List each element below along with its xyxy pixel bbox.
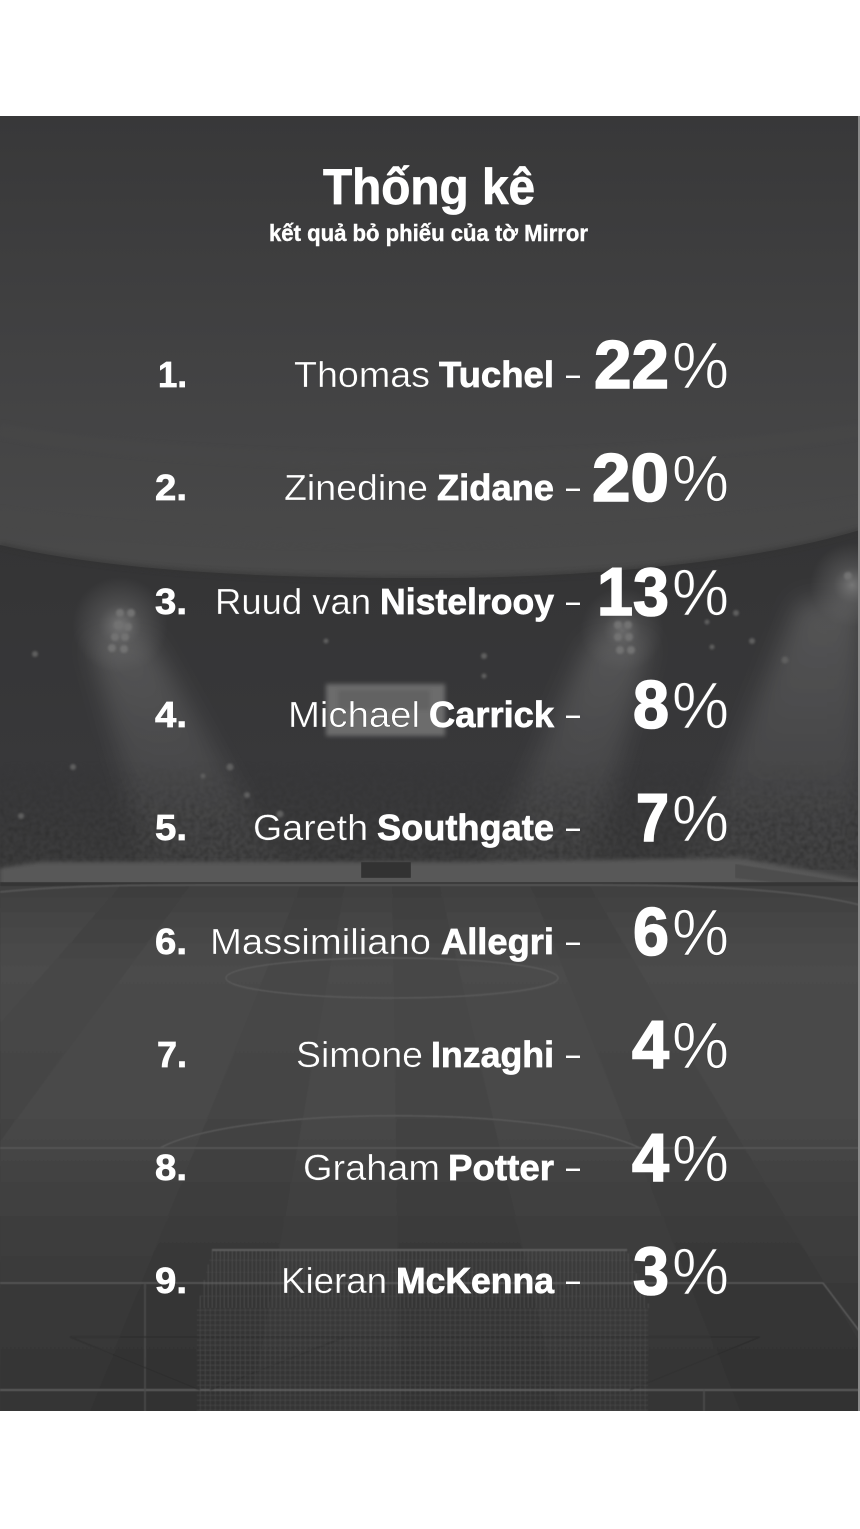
row 9: Kieran McKenna 3%: McKenna [396, 1260, 555, 1301]
pitch markings [0, 958, 860, 1411]
row 4: Michael Carrick 8% [155, 667, 729, 743]
row 3: Ruud van Nistelrooy 13%: – [566, 580, 580, 621]
row 9: Kieran McKenna 3% [155, 1233, 729, 1309]
row 3: Ruud van Nistelrooy 13%: Ruud van [215, 581, 371, 622]
row 8: Graham Potter 4%: Potter [448, 1147, 554, 1188]
row 6: Massimiliano Allegri 6%: Allegri [441, 921, 554, 962]
row 3: Ruud van Nistelrooy 13%: 13 [597, 554, 669, 630]
row 4: Michael Carrick 8%: – [566, 693, 580, 734]
subtitle: kết quả bỏ phiếu của tờ Mirror [269, 220, 588, 246]
row 7: Simone Inzaghi 4%: 7. [157, 1034, 187, 1075]
row 2: Zinedine Zidane 20%: 2. [155, 467, 187, 508]
goal net [197, 1250, 650, 1411]
row 5: Gareth Southgate 7% [155, 780, 729, 856]
row 5: Gareth Southgate 7%: – [566, 806, 580, 847]
row 4: Michael Carrick 8%: Carrick [429, 694, 555, 735]
row 3: Ruud van Nistelrooy 13%: 3. [155, 581, 187, 622]
scoreboard [326, 684, 445, 736]
row 7: Simone Inzaghi 4%: Simone [296, 1034, 423, 1075]
row 4: Michael Carrick 8%: 8 [633, 667, 669, 743]
row 6: Massimiliano Allegri 6%: Massimiliano [210, 921, 431, 962]
row 7: Simone Inzaghi 4%: 4 [632, 1007, 669, 1083]
row 5: Gareth Southgate 7%: % [672, 781, 729, 855]
row 6: Massimiliano Allegri 6% [155, 894, 729, 970]
row 8: Graham Potter 4%: 4 [632, 1120, 669, 1196]
row 8: Graham Potter 4% [155, 1120, 729, 1196]
row 4: Michael Carrick 8%: % [672, 668, 729, 742]
row 5: Gareth Southgate 7%: 5. [155, 807, 187, 848]
row 4: Michael Carrick 8%: Michael [288, 694, 420, 735]
pitch [0, 882, 860, 1411]
row 2: Zinedine Zidane 20%: % [672, 441, 729, 515]
row 9: Kieran McKenna 3%: 9. [155, 1260, 187, 1301]
row 5: Gareth Southgate 7%: Gareth [253, 807, 368, 848]
row 7: Simone Inzaghi 4%: Inzaghi [431, 1034, 554, 1075]
row 9: Kieran McKenna 3%: – [566, 1259, 580, 1300]
row 8: Graham Potter 4%: – [566, 1146, 580, 1187]
row 1: Thomas Tuchel 22% [158, 327, 729, 403]
row 3: Ruud van Nistelrooy 13%: Nistelrooy [380, 581, 554, 622]
row 3: Ruud van Nistelrooy 13%: % [672, 555, 729, 629]
row 9: Kieran McKenna 3%: Kieran [281, 1260, 387, 1301]
row 9: Kieran McKenna 3%: % [672, 1234, 729, 1308]
row 4: Michael Carrick 8%: 4. [155, 694, 187, 735]
row 8: Graham Potter 4%: % [672, 1121, 729, 1195]
row 8: Graham Potter 4%: 8. [155, 1147, 187, 1188]
row 6: Massimiliano Allegri 6%: – [566, 920, 580, 961]
row 6: Massimiliano Allegri 6%: 6. [155, 921, 187, 962]
row 7: Simone Inzaghi 4% [157, 1007, 729, 1083]
row 1: Thomas Tuchel 22%: – [566, 353, 580, 394]
row 2: Zinedine Zidane 20%: – [566, 466, 580, 507]
row 8: Graham Potter 4%: Graham [303, 1147, 440, 1188]
row 6: Massimiliano Allegri 6%: 6 [633, 894, 669, 970]
row 2: Zinedine Zidane 20%: Zidane [437, 467, 554, 508]
row 7: Simone Inzaghi 4%: – [566, 1033, 580, 1074]
row 1: Thomas Tuchel 22%: 22 [594, 327, 669, 403]
row 6: Massimiliano Allegri 6%: % [672, 895, 729, 969]
row 1: Thomas Tuchel 22%: 1. [158, 354, 187, 395]
row 3: Ruud van Nistelrooy 13% [155, 554, 729, 630]
row 9: Kieran McKenna 3%: 3 [633, 1233, 669, 1309]
row 1: Thomas Tuchel 22%: Thomas [294, 354, 430, 395]
row 2: Zinedine Zidane 20%: Zinedine [284, 467, 428, 508]
row 7: Simone Inzaghi 4%: % [672, 1008, 729, 1082]
row 2: Zinedine Zidane 20% [155, 440, 729, 516]
row 5: Gareth Southgate 7%: 7 [636, 780, 669, 856]
row 1: Thomas Tuchel 22%: % [672, 328, 729, 402]
title: Thống kê [323, 159, 535, 215]
ranking list [155, 327, 729, 1309]
stadium interior [0, 556, 858, 882]
row 5: Gareth Southgate 7%: Southgate [377, 807, 554, 848]
roof canopy [0, 344, 858, 578]
row 1: Thomas Tuchel 22%: Tuchel [439, 354, 554, 395]
row 2: Zinedine Zidane 20%: 20 [592, 440, 669, 516]
stand wall [0, 857, 858, 882]
